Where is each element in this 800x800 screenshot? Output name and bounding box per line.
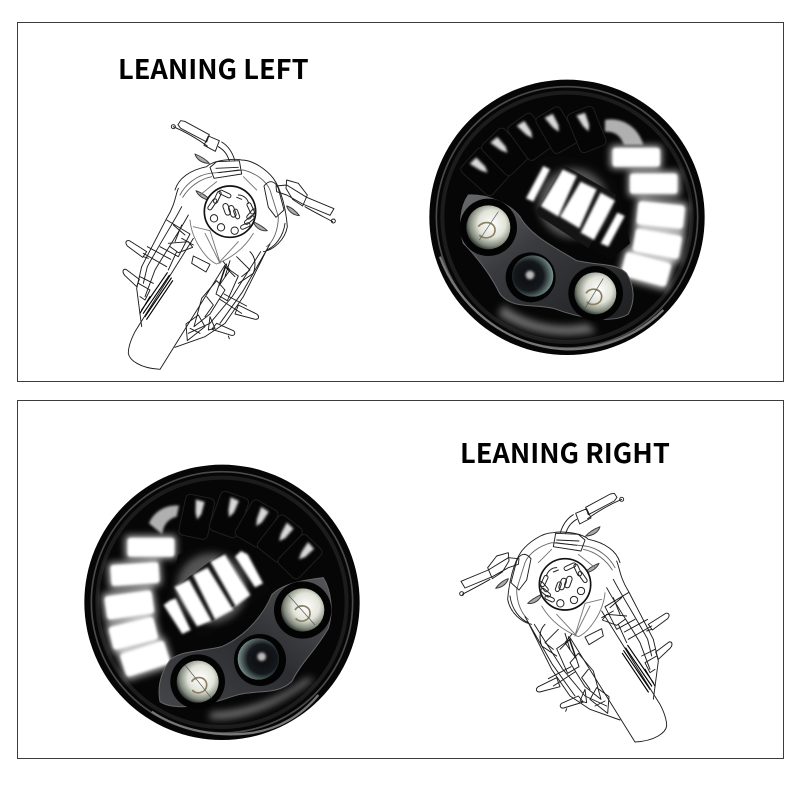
low beam lens right	[568, 266, 623, 321]
lower lens panel	[461, 195, 633, 319]
upper dark LED modules	[178, 490, 324, 581]
low beam lens left	[460, 199, 517, 256]
heading: leaning right: LEANING RIGHT	[460, 430, 670, 470]
center LED module	[162, 546, 272, 638]
right side DRL bars lit	[611, 146, 687, 290]
headlight: left side lit	[84, 464, 360, 740]
illustration: motorcycle leaning right	[459, 492, 672, 742]
dark centre lens	[234, 634, 286, 686]
low beam lens bottom left	[170, 654, 225, 709]
dark centre lens	[506, 252, 556, 302]
left side DRL bars lit	[102, 536, 176, 680]
low beam lens top right	[274, 581, 331, 639]
housing ring	[84, 465, 360, 740]
headlight: right side lit	[429, 80, 705, 355]
center LED module	[526, 156, 630, 260]
heading: leaning left: LEANING LEFT	[118, 46, 309, 86]
upper dark LED modules	[459, 105, 608, 198]
panel: leaning left	[17, 22, 784, 382]
panel: leaning right	[17, 400, 784, 759]
illustration: motorcycle leaning left	[122, 120, 336, 370]
lower lens panel	[159, 578, 331, 707]
housing ring	[429, 80, 705, 355]
